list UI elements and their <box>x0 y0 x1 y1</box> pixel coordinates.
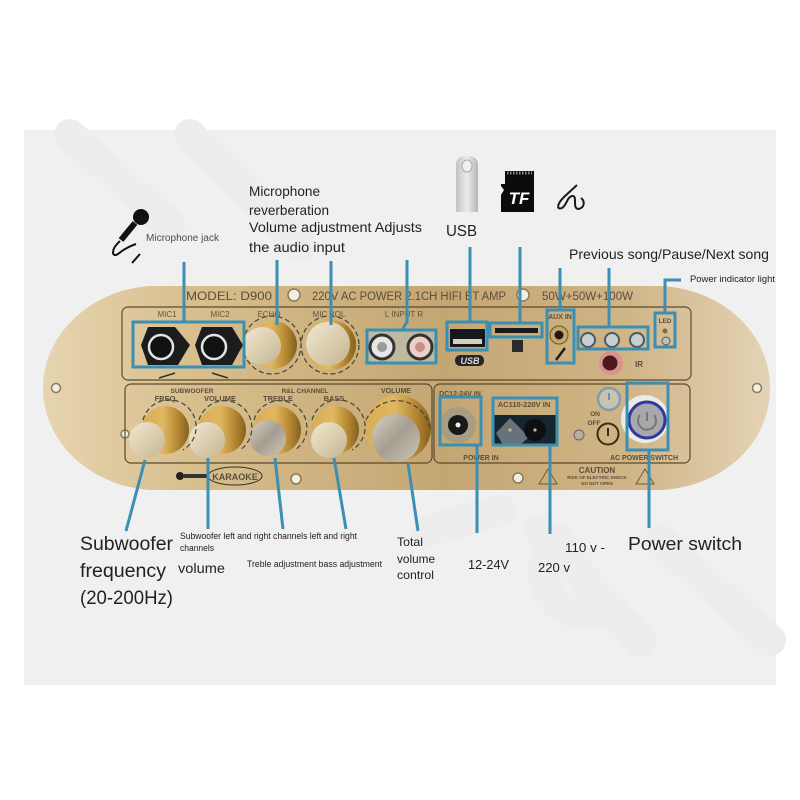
callout boxes <box>133 310 675 450</box>
label: reverberation and volume: Microphone <box>249 183 320 199</box>
USB port <box>450 329 485 366</box>
mounting holes <box>52 289 762 484</box>
leader lines <box>126 247 681 534</box>
karaoke badge: KARAOKE <box>212 472 258 482</box>
amplifier plate <box>43 286 770 490</box>
plate heading text: 50W+50W+100W <box>542 289 634 303</box>
label: volume: volume <box>178 560 225 576</box>
on off icons <box>574 388 620 444</box>
knobs: echo and mic volume <box>243 310 359 374</box>
caution notice: CAUTION <box>579 466 615 475</box>
IR receiver: IR <box>635 360 643 369</box>
on off icons: OFF <box>588 420 601 427</box>
watermark bands <box>70 135 770 640</box>
icon: audio cable <box>558 185 584 209</box>
label: 220 v: 220 v <box>538 560 570 575</box>
IR receiver <box>599 351 643 375</box>
LED <box>658 318 672 345</box>
plate heading text <box>186 289 634 303</box>
RCA input <box>367 310 436 363</box>
label: 110 v -: 110 v - <box>565 540 605 555</box>
label: subwoofer and channels <box>180 531 357 553</box>
label: microphone jack: Microphone jack <box>146 233 220 244</box>
knobs: subwoofer and channels: TREBLE <box>263 394 293 403</box>
on off icons: ON <box>590 411 600 418</box>
AC socket: AC110-220V IN <box>498 400 550 409</box>
USB port: USB <box>460 356 480 366</box>
DC power jack: DC12-24V IN <box>439 391 481 398</box>
icon: microphone <box>113 209 149 263</box>
label: total volume control: control <box>397 568 434 582</box>
plate body <box>43 286 770 490</box>
icon: TF card <box>501 171 534 212</box>
knobs: subwoofer and channels: VOLUME <box>204 394 236 403</box>
label: subwoofer and channels: Subwoofer left and right channels left and right <box>180 531 357 541</box>
label: reverberation and volume: Volume adjustment Adjusts <box>249 219 422 235</box>
plate heading text: MODEL: D900 <box>186 289 272 303</box>
caution notice: DO NOT OPEN <box>581 481 613 486</box>
label: 12-24V: 12-24V <box>468 557 509 572</box>
label: total volume control <box>397 535 435 582</box>
label: subwoofer frequency: Subwoofer <box>80 534 174 555</box>
label: subwoofer frequency <box>80 534 174 609</box>
caution notice: RISK OF ELECTRIC SHOCK <box>567 475 627 480</box>
label: subwoofer and channels: channels <box>180 543 214 553</box>
knobs: echo and mic volume: ECHO <box>257 310 281 319</box>
label: power switch: Power switch <box>628 534 742 554</box>
microphone jacks <box>141 310 243 378</box>
DC power jack: POWER IN <box>463 455 499 462</box>
knobs: subwoofer and channels: R&L CHANNEL <box>282 388 328 395</box>
icon: TF card: TF <box>509 189 530 208</box>
knobs: subwoofer and channels: VOLUME <box>381 388 411 395</box>
icon: USB drive <box>456 156 478 212</box>
label: USB: USB <box>446 223 477 240</box>
label: subwoofer frequency: frequency <box>80 561 167 582</box>
playback buttons <box>581 333 644 347</box>
label: subwoofer frequency: (20-200Hz) <box>80 588 173 609</box>
microphone jacks: MIC2 <box>210 310 230 319</box>
AUX jack: AUX IN <box>548 314 572 321</box>
label: reverberation and volume: reverberation <box>249 202 329 218</box>
label: reverberation and volume <box>249 183 422 255</box>
AC socket <box>494 400 556 445</box>
AUX jack <box>548 314 572 360</box>
label: playback controls: Previous song/Pause/Next song <box>569 246 769 262</box>
power switch button: AC POWER SWITCH <box>610 455 678 462</box>
label: reverberation and volume: the audio input <box>249 239 345 255</box>
DC power jack <box>439 391 499 462</box>
power switch button <box>610 395 678 462</box>
karaoke badge <box>176 467 262 485</box>
background panel <box>24 130 776 685</box>
knobs: subwoofer and channels <box>129 388 431 462</box>
knobs: echo and mic volume: MIC VOL <box>313 310 346 319</box>
label: total volume control: Total <box>397 535 423 549</box>
microphone jacks: MIC1 <box>157 310 177 319</box>
knobs: subwoofer and channels: SUBWOOFER <box>171 388 214 395</box>
TF slot <box>495 328 538 352</box>
plate heading text: 220V AC POWER 2.1CH HIFI BT AMP <box>312 291 506 303</box>
caution notice <box>539 466 654 486</box>
knobs: subwoofer and channels: FREQ <box>155 394 176 403</box>
RCA input: L INPUT R <box>385 310 423 319</box>
label: power indicator: Power indicator light <box>690 274 776 284</box>
label: treble and bass: Treble adjustment bass adjustment <box>247 559 382 569</box>
knobs: subwoofer and channels: BASS <box>324 394 344 403</box>
LED: LED <box>658 318 672 325</box>
section outlines <box>122 307 691 463</box>
label: total volume control: volume <box>397 552 435 566</box>
